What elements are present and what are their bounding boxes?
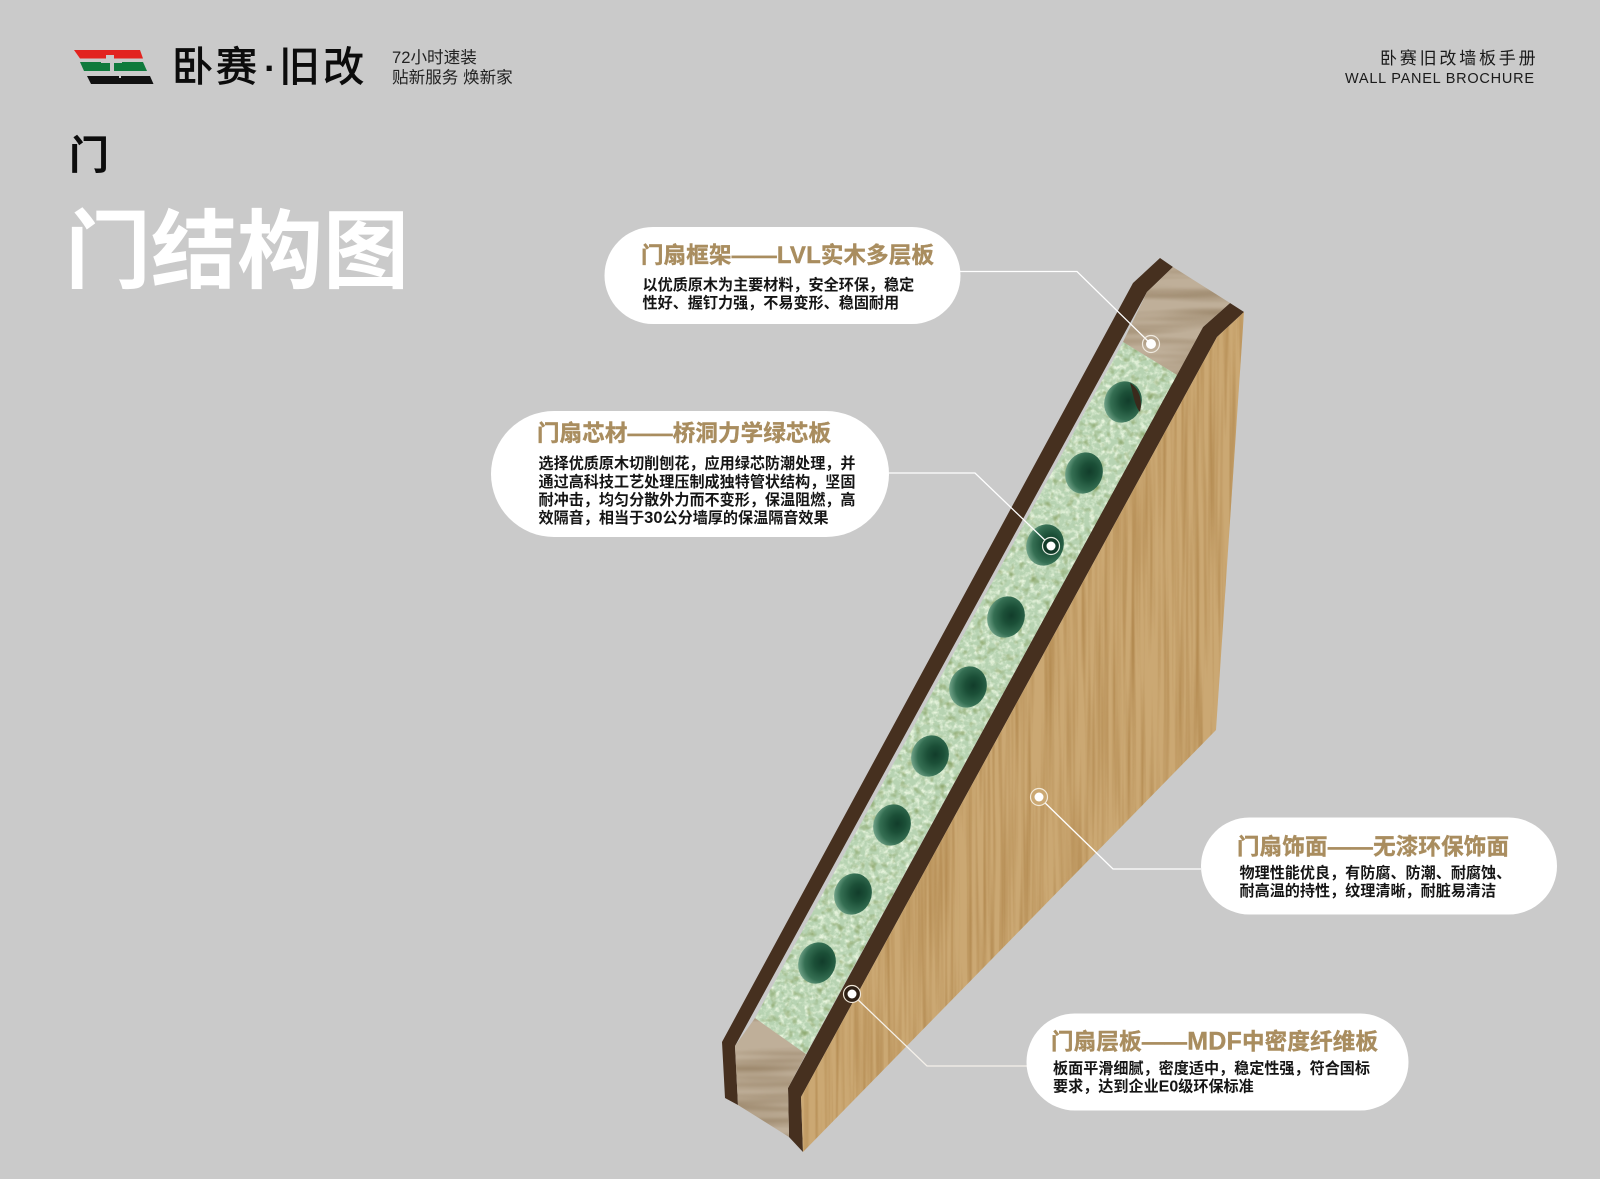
callout heading: 门扇饰面——无漆环保饰面 — [1237, 834, 1509, 860]
brand name: 卧赛 — [172, 33, 257, 93]
veneer face — [790, 300, 1260, 1160]
brochure label: WALL PANEL BROCHURE — [1345, 71, 1534, 87]
section label: 门 — [69, 123, 109, 181]
slogan: 72小时速装 — [392, 48, 477, 67]
connector: mdf layer — [844, 986, 1027, 1066]
callout body — [642, 276, 914, 312]
callout body: 选择优质原木切削刨花，应用绿芯防潮处理，并 — [538, 454, 855, 472]
brand name — [172, 33, 364, 93]
slogan: 贴新服务 焕新家 — [392, 68, 513, 87]
lvl frame bottom — [735, 1018, 806, 1137]
title: 门结构图 — [65, 181, 409, 306]
left mdf layer — [722, 258, 1173, 1105]
brand name: 旧改 — [279, 33, 364, 93]
callout body — [1240, 864, 1511, 900]
lvl frame top — [1123, 267, 1230, 375]
callout heading: 门扇层板——MDF中密度纤维板 — [1051, 1028, 1378, 1056]
callout: door layer — [1026, 1014, 1408, 1110]
green core — [750, 335, 1185, 1060]
right mdf layer — [788, 303, 1244, 1152]
callout body: 性好、握钉力强，不易变形、稳固耐用 — [642, 294, 899, 312]
callout body: 耐高温的持性，纹理清晰，耐脏易清洁 — [1240, 882, 1496, 900]
callout heading: 门扇芯材——桥洞力学绿芯板 — [537, 421, 831, 446]
callout body: 以优质原木为主要材料，安全环保，稳定 — [642, 276, 914, 294]
callout: door frame — [604, 227, 960, 324]
callout body: 要求，达到企业E0级环保标准 — [1053, 1078, 1254, 1096]
brand name: · — [265, 52, 275, 85]
callout body: 效隔音，相当于30公分墙厚的保温隔音效果 — [538, 509, 829, 527]
connector: frame — [960, 272, 1160, 352]
callout body: 通过高科技工艺处理压制成独特管状结构，坚固 — [538, 473, 855, 491]
brochure label: 卧赛旧改墙板手册 — [1380, 48, 1538, 68]
door cross-section diagram — [722, 258, 1260, 1160]
callout heading: 门扇框架——LVL实木多层板 — [641, 242, 934, 269]
callout body — [538, 454, 855, 527]
brochure label — [1345, 48, 1538, 87]
hole shadow — [1130, 383, 1141, 412]
callout body — [1053, 1060, 1370, 1096]
callout body: 物理性能优良，有防腐、防潮、耐腐蚀、 — [1240, 864, 1511, 882]
callout body: 耐冲击，均匀分散外力而不变形，保温阻燃，高 — [538, 491, 855, 509]
core holes — [792, 376, 1148, 989]
slogan — [392, 48, 513, 87]
callout: door core — [491, 411, 889, 537]
callout body: 板面平滑细腻，密度适中，稳定性强，符合国标 — [1053, 1060, 1370, 1078]
icon: brand stripes — [74, 50, 154, 84]
connector: veneer — [1030, 788, 1201, 869]
connector: core — [889, 473, 1060, 554]
logo — [74, 33, 513, 93]
callout: door veneer — [1201, 818, 1557, 914]
